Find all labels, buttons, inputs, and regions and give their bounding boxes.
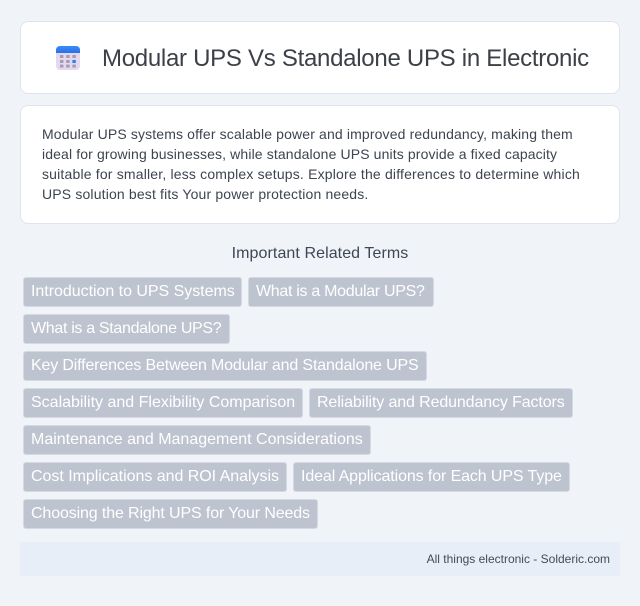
- tag: Maintenance and Management Considerations: [31, 431, 363, 448]
- tag: Key Differences Between Modular and Standalone UPS: [31, 357, 419, 374]
- tag: [23, 388, 303, 418]
- tag: [23, 499, 318, 529]
- panel: summary text: [20, 105, 620, 224]
- summary paragraph: Modular UPS systems offer scalable power and improved redundancy, making them: [42, 126, 573, 142]
- tag: Introduction to UPS Systems: [31, 283, 235, 300]
- summary paragraph: ideal for growing businesses, while standalone UPS units provide a fixed capacity: [42, 146, 557, 162]
- panel: title card: [20, 21, 620, 94]
- tag: Reliability and Redundancy Factors: [317, 394, 565, 411]
- summary paragraph: [42, 126, 580, 202]
- panel: term tags: [23, 277, 573, 529]
- tag: Choosing the Right UPS for Your Needs: [31, 505, 310, 522]
- tag: Scalability and Flexibility Comparison: [31, 394, 295, 411]
- footer credit: All things electronic - Solderic.com: [427, 552, 610, 566]
- tag: [23, 277, 242, 307]
- title: Modular UPS Vs Standalone UPS in Electronic: [102, 45, 589, 72]
- tag: [23, 462, 287, 492]
- tag: [309, 388, 573, 418]
- icon: calendar grid: [56, 46, 80, 70]
- tag: Ideal Applications for Each UPS Type: [301, 468, 562, 485]
- tag: Cost Implications and ROI Analysis: [31, 468, 279, 485]
- tag: [23, 314, 230, 344]
- summary paragraph: UPS solution best fits Your power protection needs.: [42, 186, 368, 202]
- tag: [23, 351, 427, 381]
- summary paragraph: suitable for smaller, less complex setups. Explore the differences to determine which: [42, 166, 580, 182]
- tag: [248, 277, 434, 307]
- footer bar: [20, 542, 620, 576]
- tag: What is a Modular UPS?: [256, 283, 425, 300]
- tag: What is a Standalone UPS?: [31, 320, 221, 337]
- tag: [293, 462, 570, 492]
- heading: related terms: Important Related Terms: [232, 245, 408, 262]
- tag: [23, 425, 371, 455]
